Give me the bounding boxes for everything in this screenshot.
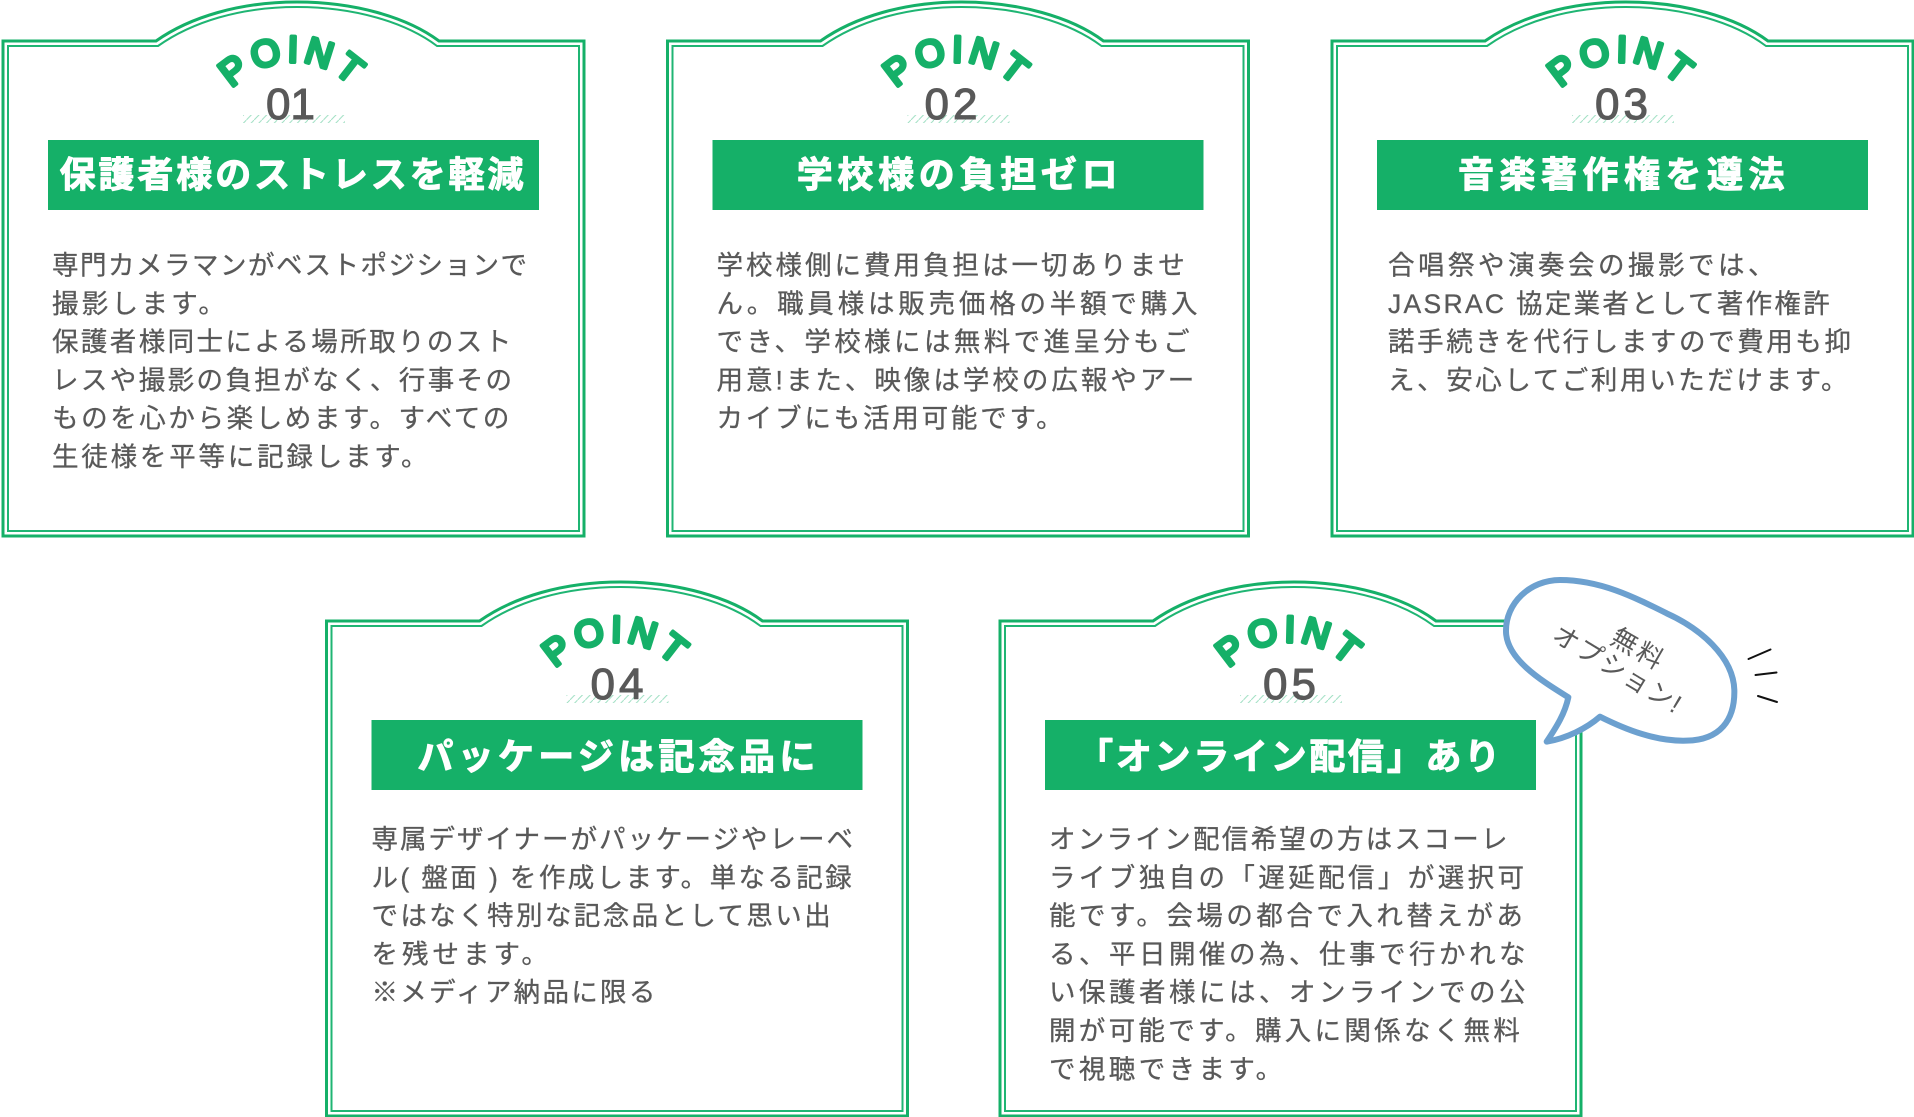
body text: ん。職員様は販売価格の半額で購入 <box>716 289 1201 319</box>
body text: で視聴できます。 <box>1049 1054 1286 1084</box>
body text: 諾手続きを代行しますので費用も抑 <box>1388 327 1854 357</box>
callout: free option speech bubble: 無料 <box>1606 622 1671 677</box>
body text: 用意!また、映像は学校の広報やアー <box>716 365 1197 395</box>
body text: でき、学校様には無料で進呈分もご <box>716 327 1193 357</box>
point label: POINT <box>1545 34 1697 88</box>
number: 01 <box>266 80 315 129</box>
body text: 能です。会場の都合で入れ替えがあ <box>1049 901 1526 931</box>
body text: 保護者様同士による場所取りのスト <box>52 327 514 357</box>
body text <box>372 824 855 1008</box>
body text: JASRAC 協定業者として著作権許 <box>1388 289 1832 319</box>
body text: 合唱祭や演奏会の撮影では、 <box>1388 250 1778 280</box>
body text: 開が可能です。購入に関係なく無料 <box>1049 1016 1523 1046</box>
body text: 生徒様を平等に記録します。 <box>52 442 430 472</box>
number underline <box>908 115 1010 123</box>
point label: POINT <box>540 614 692 668</box>
heading band: 「オンライン配信」あり <box>1077 736 1503 777</box>
heading band: 学校様の負担ゼロ <box>797 154 1122 195</box>
frame <box>3 2 584 536</box>
body text: ものを心から楽しめます。すべての <box>52 404 512 434</box>
body text: を残せます。 <box>372 939 552 969</box>
heading band <box>1377 140 1868 210</box>
heading band: 保護者様のストレスを軽減 <box>60 154 526 195</box>
panel: point 05 <box>998 580 1582 1117</box>
heading band <box>712 140 1204 210</box>
heading band <box>372 720 862 790</box>
body text: い保護者様には、オンラインでの公 <box>1049 978 1529 1008</box>
body text: え、安心してご利用いただけます。 <box>1388 365 1850 395</box>
point label: POINT <box>880 34 1032 88</box>
icon: emphasis marks <box>1748 650 1777 702</box>
number: 05 <box>1263 660 1320 709</box>
point label: POINT <box>1213 614 1365 668</box>
body text <box>716 250 1201 434</box>
frame <box>668 2 1248 536</box>
body text: 学校様側に費用負担は一切ありませ <box>716 250 1188 280</box>
heading band <box>1045 720 1536 790</box>
callout: free option speech bubble <box>1506 580 1734 742</box>
number: 02 <box>924 80 981 129</box>
number underline <box>566 695 668 703</box>
body text: 専門カメラマンがベストポジションで <box>52 250 529 280</box>
body text: る、平日開催の為、仕事で行かれな <box>1049 939 1529 969</box>
body text: ル( 盤面 ) を作成します。単なる記録 <box>372 863 854 893</box>
body text: カイブにも活用可能です。 <box>716 404 1065 434</box>
panel: point 02 <box>666 0 1250 538</box>
body text: レスや撮影の負担がなく、行事その <box>52 365 514 395</box>
frame <box>326 582 908 1116</box>
panel: point 04 <box>325 580 909 1117</box>
number: 03 <box>1595 80 1652 129</box>
body text: 専属デザイナーがパッケージやレーベ <box>372 824 855 854</box>
panel: point 03 <box>1330 0 1914 538</box>
panel: point 01 <box>2 0 586 538</box>
point label: POINT <box>216 34 368 88</box>
number underline <box>1572 115 1674 123</box>
number underline <box>1240 695 1342 703</box>
frame <box>1332 2 1913 536</box>
frame <box>1000 582 1581 1116</box>
number underline <box>243 115 345 123</box>
body text <box>1388 250 1854 395</box>
heading band: パッケージは記念品に <box>417 736 820 777</box>
body text: オンライン配信希望の方はスコーレ <box>1049 824 1510 854</box>
number: 04 <box>590 660 647 709</box>
heading band: 音楽著作権を遵法 <box>1458 154 1790 195</box>
body text: 撮影します。 <box>52 289 228 319</box>
body text <box>1049 824 1529 1084</box>
callout: free option speech bubble: オプション! <box>1547 619 1688 720</box>
body text: ではなく特別な記念品として思い出 <box>372 901 833 931</box>
body text <box>52 250 529 472</box>
heading band <box>48 140 539 210</box>
body text: ライブ独自の「遅延配信」が選択可 <box>1049 863 1527 893</box>
body text: ※メディア納品に限る <box>372 978 658 1008</box>
